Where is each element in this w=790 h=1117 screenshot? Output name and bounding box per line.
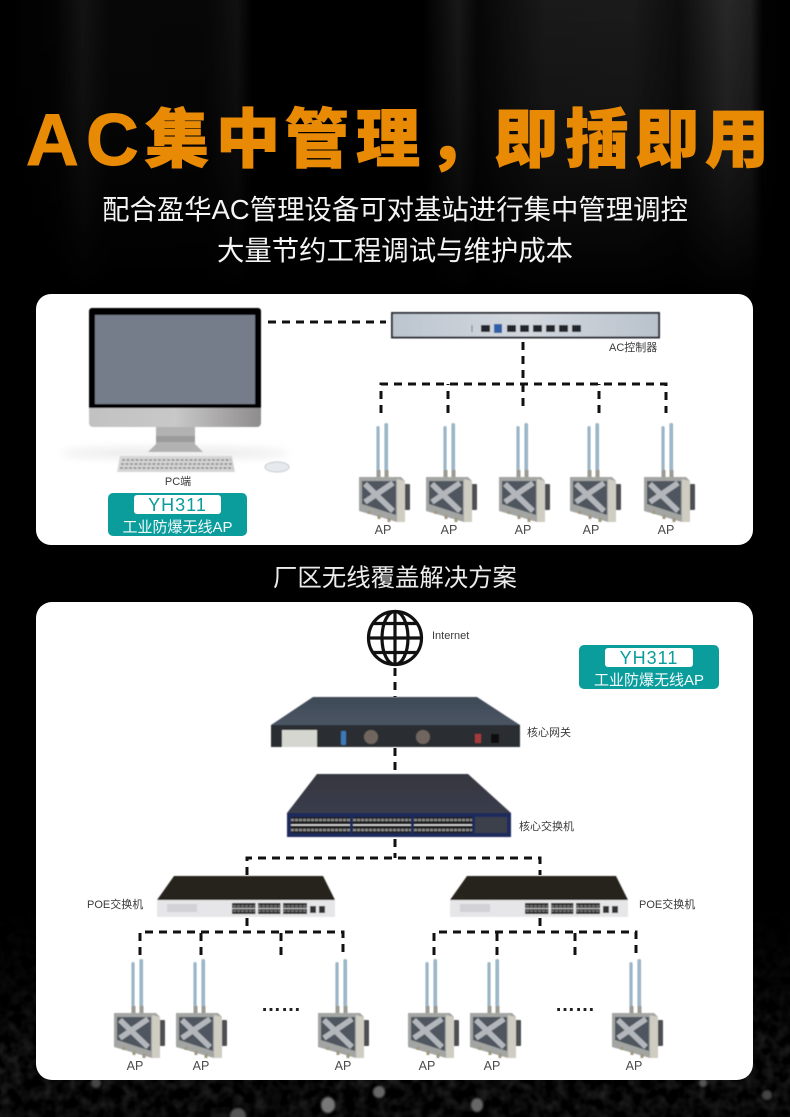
AP device 4: AP <box>583 523 599 537</box>
AP device 4 <box>570 423 621 537</box>
AP device 2 <box>426 423 477 537</box>
connector: internet to gateway <box>394 668 396 697</box>
device: core switch <box>287 774 511 837</box>
AP device 5: AP <box>658 523 674 537</box>
badge: YH311 <box>579 645 719 689</box>
AP device left 2: AP <box>193 1059 209 1073</box>
title: AC <box>26 100 139 181</box>
badge: YH311: YH311 <box>148 495 207 515</box>
subtitle: 配合盈华AC管理设备可对基站进行集中管理调控 <box>102 194 688 225</box>
icon: mouse <box>265 462 289 472</box>
badge: YH311 <box>108 493 247 536</box>
connector: left POE to APs <box>140 918 343 955</box>
AP device 5 <box>644 423 695 537</box>
panel: AC management diagram <box>36 294 753 545</box>
AP device left 1 <box>114 959 165 1073</box>
subtitle <box>102 194 688 266</box>
AP device right 3: AP <box>626 1059 642 1073</box>
ellipsis left: …… <box>261 994 301 1016</box>
AP device left 2 <box>176 959 227 1073</box>
connector: right POE to APs <box>434 918 636 955</box>
AP device left 3: AP <box>335 1059 351 1073</box>
AC controller label: AC控制器 <box>609 340 657 354</box>
AP device 1 <box>359 423 410 537</box>
connector: PC to controller <box>268 320 386 324</box>
AP device right 1: AP <box>419 1059 435 1073</box>
title: 集中管理，即插即用 <box>145 104 769 176</box>
Internet label: Internet <box>432 630 469 642</box>
POE label left: POE交换机 <box>87 897 143 911</box>
AP device right 3 <box>612 959 663 1073</box>
device: POE switch right <box>450 876 628 917</box>
connector: controller to APs <box>381 342 666 413</box>
core switch label: 核心交换机 <box>519 819 574 833</box>
badge: YH311: 工业防爆无线AP <box>122 519 233 536</box>
icon: desktop monitor <box>60 308 290 472</box>
AP device 1: AP <box>375 523 391 537</box>
icon: keyboard <box>117 456 235 472</box>
connector: core switch to POE switches <box>247 839 540 875</box>
badge: YH311: YH311 <box>620 648 678 668</box>
section heading: 厂区无线覆盖解决方案 <box>273 565 517 592</box>
core gateway label: 核心网关 <box>527 725 571 739</box>
icon: globe <box>368 612 422 664</box>
subtitle: 大量节约工程调试与维护成本 <box>217 235 573 266</box>
AP device left 1: AP <box>127 1059 143 1073</box>
ellipsis right: …… <box>555 994 595 1016</box>
AP device 3 <box>499 423 550 537</box>
AP device 3: AP <box>515 523 531 537</box>
AP device 2: AP <box>441 523 457 537</box>
device: core gateway <box>271 697 520 747</box>
AP device right 2: AP <box>484 1059 500 1073</box>
badge: YH311: 工业防爆无线AP <box>594 672 704 689</box>
device: AC controller <box>392 313 659 338</box>
PC label: PC端 <box>165 475 191 488</box>
AP device right 2 <box>470 959 521 1073</box>
panel: factory wireless coverage <box>36 602 753 1080</box>
AP device right 1 <box>408 959 459 1073</box>
connector: gateway to core switch <box>394 748 396 772</box>
device: POE switch left <box>157 876 335 917</box>
POE label right: POE交换机 <box>639 897 695 911</box>
AP device left 3 <box>318 959 369 1073</box>
